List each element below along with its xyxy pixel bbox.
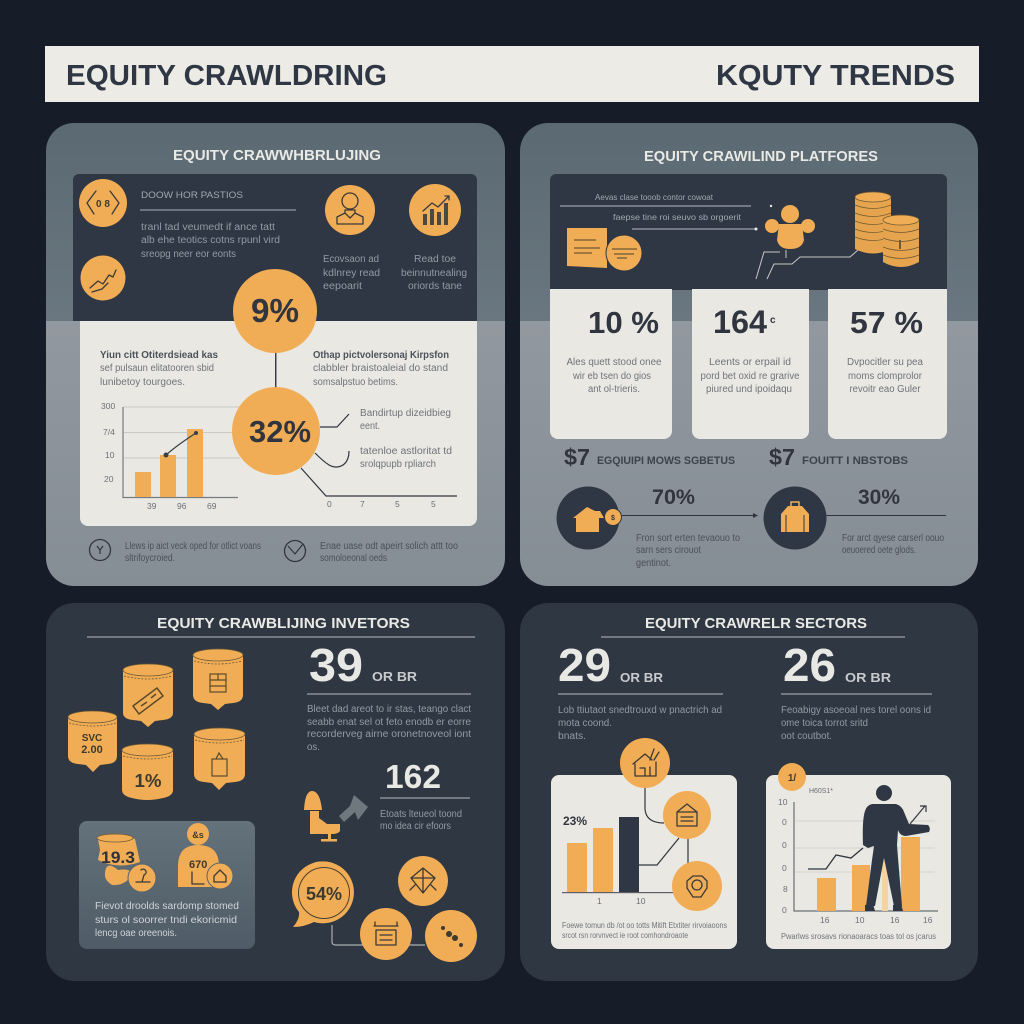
title banner xyxy=(45,46,979,102)
chart with bars: 0 xyxy=(782,840,787,850)
text block: person caption: eepoarit xyxy=(323,281,362,292)
card: 57 percent: Dvpocitler su pea xyxy=(847,357,923,368)
icon: coins badge xyxy=(425,910,477,962)
icon: pouch with ledger xyxy=(193,649,243,710)
text block: chart caption: Read toe xyxy=(414,254,456,265)
text block: 70 percent copy: Fron sort erten tevaouo to xyxy=(636,533,740,544)
text block: 70 percent copy: sarn sers cirouot xyxy=(636,545,701,556)
text block: header lines: Aevas clase tooob contor cowoat xyxy=(595,192,714,202)
icon: pouch with figures: SVC xyxy=(82,733,102,744)
icon: person xyxy=(325,185,375,235)
icon: pouch with banknote xyxy=(123,664,173,727)
stat: 29: OR BR xyxy=(620,670,664,685)
text block: footnote right: Enae uase odt apeirt solich attt too xyxy=(320,541,458,552)
text block: footnote left: Llews ip aict veck oped for otlict voans xyxy=(125,541,261,552)
text block: 39 copy: os. xyxy=(307,742,320,753)
icon: person percent: &s xyxy=(192,830,204,840)
chart with bars: 10 xyxy=(855,915,865,925)
text block: header copy: DOOW HOR PASTIOS xyxy=(141,190,243,201)
text block: footnote right: somoloeonal oeds xyxy=(320,553,387,564)
chart with bars: 10 xyxy=(778,797,788,807)
connector lines: 0 xyxy=(327,499,332,509)
icon: clock badge left xyxy=(90,540,110,560)
icon: house with coin xyxy=(556,486,622,550)
chart with bars: 16 xyxy=(820,915,830,925)
heading: equity investors: $7 xyxy=(769,444,795,470)
text block: left copy: sef pulsaun elitatooren sbid xyxy=(100,363,214,374)
icon: code badge: 0 8 xyxy=(96,199,110,210)
icon: investor figure xyxy=(756,205,858,279)
text block: card copy xyxy=(562,921,727,940)
stat: 29: 29 xyxy=(558,639,611,691)
text block: callouts: srolqpupb rpliarch xyxy=(360,459,436,470)
text block: 26 copy: oot coutbot. xyxy=(781,731,832,742)
bar chart: 69 xyxy=(207,501,217,511)
text block: 29 copy: bnats. xyxy=(558,731,586,742)
card: 164: Leents or erpail id xyxy=(709,357,791,368)
icon: person percent: 670 xyxy=(189,859,207,871)
icon: house with coin: $ xyxy=(611,515,615,522)
text block: chart caption: oriords tane xyxy=(408,281,462,292)
card: bar chart with icons xyxy=(551,738,737,949)
text block: 39 copy: recorderveg airne oronetnoveol iont xyxy=(307,729,471,740)
chart with bars: H60S1* xyxy=(809,788,833,795)
connector line xyxy=(332,925,425,945)
text block: 30 percent copy xyxy=(842,533,944,556)
icon: code badge xyxy=(79,179,127,227)
card: 164 xyxy=(692,289,809,439)
icon: person percent xyxy=(178,823,233,889)
callout bubble: 54 percent: 54% xyxy=(306,884,342,904)
text block: left copy xyxy=(100,350,218,388)
heading: equity funds: $7 xyxy=(564,444,590,470)
heading: equity investors xyxy=(769,444,908,470)
stat: 39: OR BR xyxy=(372,669,418,684)
card: chart with person xyxy=(766,763,951,949)
text block: header lines: faepse tine roi seuvo sb orgoerit xyxy=(613,212,742,222)
card: 164: piured und ipoidaqu xyxy=(706,384,792,395)
text block: right copy: Othap pictvolersonaj Kirpsfon xyxy=(313,350,449,361)
text block: 39 copy xyxy=(307,704,471,753)
chart with bars: 16 xyxy=(923,915,933,925)
card: 57 percent xyxy=(828,289,947,439)
cream content block xyxy=(80,321,477,526)
icon: person silhouette xyxy=(863,785,930,911)
text block: right copy: clabbler braistoaleial do stand xyxy=(313,363,448,374)
panel: equity crawling overview xyxy=(46,123,505,586)
text block: 26 copy: Feoabigy asoeoal nes torel oons id xyxy=(781,705,931,716)
text block: box copy: sturs ol soorrer tndi ekoricmid xyxy=(95,915,237,926)
text block: 29 copy xyxy=(558,705,722,742)
stat: 9% xyxy=(233,269,317,353)
card: 10 percent xyxy=(550,289,672,439)
stat: 32% xyxy=(232,387,320,475)
stat: 26: OR BR xyxy=(845,670,892,685)
text block: 30 percent copy: oeuoered oete glods. xyxy=(842,545,916,556)
stat: 39: 39 xyxy=(309,639,363,691)
line and 30 percent stat xyxy=(826,486,946,516)
card: 164: 164 xyxy=(713,304,767,340)
icon: bulb badge xyxy=(672,861,722,911)
title banner: EQUITY CRAWLDRING xyxy=(66,60,387,92)
icon: pouch with percent xyxy=(122,744,173,800)
icon: pouch with figures xyxy=(68,711,117,772)
bar chart: 96 xyxy=(177,501,187,511)
icon: pouch with bag xyxy=(194,728,245,790)
chart with bars: 0 xyxy=(782,905,787,915)
text block: footnote left xyxy=(125,541,261,564)
bar chart: 7/4 xyxy=(103,427,115,437)
dark header block xyxy=(73,174,477,321)
stat: 26 xyxy=(781,639,932,694)
text block: box copy: lencg oae oreenois. xyxy=(95,928,177,939)
icon: heart badge right xyxy=(284,540,306,562)
connector lines: 7 xyxy=(360,499,365,509)
card: 10 percent: 10 % xyxy=(588,305,659,340)
panel: equity crawling platforms xyxy=(520,123,978,586)
text block: 26 copy: ome toica torrot sritd xyxy=(781,718,868,729)
text block: header copy: tranl tad veumedt if ance tatt xyxy=(141,222,275,233)
panel heading: EQUITY CRAWRELR SECTORS xyxy=(645,615,867,632)
icon: documents xyxy=(567,228,642,271)
card: 10 percent: ant ol-trieris. xyxy=(588,384,640,395)
text block: person caption: kdlnrey read xyxy=(323,268,380,279)
heading: equity investors: FOUITT I NBSTOBS xyxy=(802,455,908,467)
text block: callouts: Bandirtup dizeidbieg xyxy=(360,408,451,419)
connector lines xyxy=(301,414,457,509)
text block: 26 copy xyxy=(781,705,931,742)
icon: house badge xyxy=(620,738,670,788)
bar chart: 1 xyxy=(597,896,602,906)
text block: 29 copy: mota coond. xyxy=(558,718,612,729)
panel heading: EQUITY CRAWBLIJING INVETORS xyxy=(157,615,410,632)
bar chart: 300 xyxy=(101,401,115,411)
card: 57 percent: revoitr eao Guler xyxy=(850,384,921,395)
arrow and 70 percent stat xyxy=(621,486,758,518)
card: 57 percent: moms clomprolor xyxy=(848,371,923,382)
card: 164: pord bet oxid re grarive xyxy=(700,371,800,382)
text block: chart caption: beinnutnealing xyxy=(401,268,467,279)
dark header block xyxy=(550,174,947,290)
stat: 32%: 32% xyxy=(249,414,311,449)
icon: pouch with figures: 2.00 xyxy=(81,744,103,756)
icon: small badge xyxy=(778,763,806,791)
card: 164: c xyxy=(770,315,776,326)
text block: person caption: Ecovsaon ad xyxy=(323,254,379,265)
bar chart: 23% xyxy=(563,814,587,828)
text block: 70 percent copy xyxy=(636,533,740,569)
card: 10 percent: Ales quett stood onee xyxy=(566,357,662,368)
text block: callouts: tatenloe astloritat td xyxy=(360,446,452,457)
text block: callouts xyxy=(360,408,452,470)
stat: 26: 26 xyxy=(783,639,836,691)
icon: small badge: 1/ xyxy=(788,773,796,784)
title banner: KQUTY TRENDS xyxy=(716,60,955,92)
text block: left copy: Yiun citt Otiterdsiead kas xyxy=(100,350,218,361)
icon: percent pouch xyxy=(97,834,156,892)
text block: card copy: Foewe tomun db /ot oo totts Mitift Etxtiter rirvoiaoons xyxy=(562,921,727,930)
text block: header copy xyxy=(140,190,296,260)
bar chart xyxy=(101,401,240,511)
chart with bars: 16 xyxy=(890,915,900,925)
text block: 70 percent copy: gentinot. xyxy=(636,558,671,569)
panel: equity crawling sectors xyxy=(520,603,978,981)
panel heading: EQUITY CRAWWHBRLUJING xyxy=(173,147,381,164)
text block: header copy: sreopg neer eor eonts xyxy=(141,249,236,260)
bar chart: 39 xyxy=(147,501,157,511)
connector lines: 5 xyxy=(395,499,400,509)
text block: footnote right xyxy=(320,541,458,564)
text block: person caption xyxy=(323,254,380,292)
card: 57 percent: 57 % xyxy=(850,305,923,340)
text block: 30 percent copy: For arct qyese carserl oouo xyxy=(842,533,944,544)
text block: chart caption xyxy=(401,254,467,292)
connector lines: 5 xyxy=(431,499,436,509)
icon: briefcase xyxy=(764,486,826,550)
text block: header lines xyxy=(560,192,772,230)
icon: store badge xyxy=(360,908,412,960)
bar chart xyxy=(562,814,687,906)
icon: handshake xyxy=(80,256,126,300)
icon: percent pouch: 19.3 xyxy=(101,848,135,867)
chart with bars: 0 xyxy=(782,863,787,873)
icon: pouch with percent: 1% xyxy=(134,771,162,791)
stat: 9%: 9% xyxy=(251,292,299,329)
text block: 162 copy xyxy=(380,809,462,832)
text block: 162 copy: mo idea cir efoors xyxy=(380,821,451,832)
icon: kite badge xyxy=(398,856,448,906)
text block: 162 copy: Etoats lteueol toond xyxy=(380,809,462,820)
bar chart: 10 xyxy=(105,450,115,460)
stat: 162 xyxy=(380,758,470,798)
text block: box copy xyxy=(95,901,239,939)
chart with bars: 0 xyxy=(782,817,787,827)
text block: card copy: Pwarlws srosavs rionaoaracs toas tol os jcarus xyxy=(781,932,936,941)
arrow and 70 percent stat: 70% xyxy=(652,486,695,509)
heading: equity funds xyxy=(564,444,735,470)
text block: 39 copy: seabb enat sel ot feto enodb er eorre xyxy=(307,717,471,728)
icon: growth chart xyxy=(409,184,461,236)
bar chart: 10 xyxy=(636,896,646,906)
stat: 162: 162 xyxy=(385,758,441,795)
callout bubble: 54 percent xyxy=(292,861,354,927)
heading: equity funds: EGQIUIPI MOWS SGBETUS xyxy=(597,455,735,467)
stat: 29 xyxy=(558,639,723,694)
connector between stats xyxy=(275,350,276,390)
icon: envelope badge xyxy=(663,791,711,839)
icon: seated investor with arrow xyxy=(304,791,368,842)
icon: coin stacks xyxy=(855,192,919,267)
text block: right copy: somsalpstuo betims. xyxy=(313,377,398,388)
bar chart: 20 xyxy=(104,474,114,484)
chart with bars xyxy=(778,788,938,925)
stat: 39 xyxy=(307,639,471,694)
line and 30 percent stat: 30% xyxy=(858,486,900,509)
text block: header copy: alb ehe teotics cotns rpunl vird xyxy=(141,235,280,246)
text block: footnote left: sltrifoycroied. xyxy=(125,553,175,564)
text block: right copy xyxy=(313,350,449,388)
text block: 39 copy: Bleet dad areot to ir stas, teango clact xyxy=(307,704,471,715)
text block: callouts: eent. xyxy=(360,421,380,432)
text block: box copy: Fievot droolds sardomp stomed xyxy=(95,901,239,912)
text block: card copy: srcot rsn rorvnvect ie root comhondroaote xyxy=(562,931,688,940)
chart with bars: 8 xyxy=(783,884,788,894)
text block: left copy: lunibetoy tourgoes. xyxy=(100,377,185,388)
card: 10 percent: wir eb tsen do gios xyxy=(572,371,651,382)
connector lines xyxy=(639,785,688,865)
trend arrow xyxy=(910,806,926,824)
text block: 29 copy: Lob ttiutaot snedtrouxd w pnactrich ad xyxy=(558,705,722,716)
panel: equity crawling investors xyxy=(46,603,505,981)
callout box with icons xyxy=(79,821,255,949)
panel heading: EQUITY CRAWILIND PLATFORES xyxy=(644,148,878,165)
